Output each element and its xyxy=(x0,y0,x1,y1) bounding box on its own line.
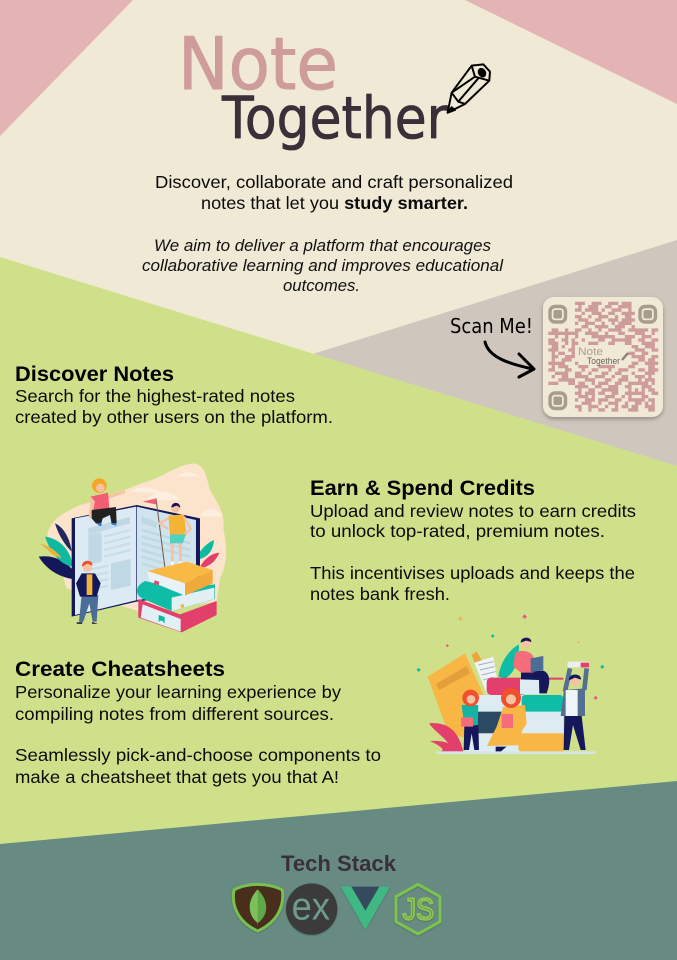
icon: Vue xyxy=(341,887,390,930)
icon: Express: ex xyxy=(292,885,330,929)
tech logos xyxy=(233,883,440,935)
section: Earn and Spend Credits xyxy=(310,477,636,604)
figure: red-haired man xyxy=(76,561,101,624)
icon: MongoDB xyxy=(233,884,283,931)
section: Discover Notes: Discover Notes xyxy=(15,363,174,386)
illustration: people reading on books xyxy=(417,614,604,754)
logo word: Together: Together xyxy=(221,84,448,152)
arrow: to QR code xyxy=(485,342,534,377)
QR code card xyxy=(543,297,663,417)
section: Create Cheatsheets: Seamlessly pick-and-choose components to xyxy=(15,745,381,765)
icon: pencil xyxy=(448,64,490,113)
callout: Scan Me: Scan Me! xyxy=(450,314,533,338)
section: Create Cheatsheets: make a cheatsheet that gets you that A! xyxy=(15,767,339,787)
leaf plants xyxy=(429,644,519,752)
logo word: Note: Note xyxy=(178,22,338,106)
section: Discover Notes: created by other users on the platform. xyxy=(15,407,333,427)
background: top-right pink triangle xyxy=(465,0,677,104)
mission statement: collaborative learning and improves educational xyxy=(142,257,504,275)
tagline: notes that let you study smarter. xyxy=(201,193,468,213)
section: Discover Notes xyxy=(15,363,333,427)
leaves xyxy=(39,523,219,579)
icon: Node.js: JS xyxy=(403,893,434,927)
section: Create Cheatsheets: Create Cheatsheets xyxy=(15,658,225,681)
section: Create Cheatsheets: compiling notes from different sources. xyxy=(15,704,334,724)
section: Earn and Spend Credits: notes bank fresh. xyxy=(310,584,450,604)
icon: Express xyxy=(286,883,337,935)
callout: Scan Me xyxy=(450,314,534,377)
background: teal footer xyxy=(0,781,677,960)
stacked books xyxy=(137,562,217,632)
QR centre logo: Note xyxy=(578,346,603,358)
figure: boy with flag xyxy=(143,498,191,570)
stacked books xyxy=(437,678,596,754)
background: green panel xyxy=(0,257,677,845)
title: Note Together logo xyxy=(178,22,490,152)
section: Earn and Spend Credits: to unlock top-rated, premium notes. xyxy=(310,521,605,541)
QR modules xyxy=(548,303,658,410)
open book xyxy=(72,505,200,617)
blob clouds xyxy=(130,472,223,517)
background: top-left pink triangle xyxy=(0,0,133,136)
illustration: people on an open book xyxy=(39,463,226,632)
figure: man reading on top xyxy=(513,638,549,693)
background: gray wedge xyxy=(300,240,677,480)
QR centre logo: Together xyxy=(587,356,620,367)
tagline: Discover, collaborate and craft personalized xyxy=(155,172,513,192)
section: Earn and Spend Credits: Upload and review notes to earn credits xyxy=(310,501,636,521)
mission statement xyxy=(142,237,504,295)
mission statement: outcomes. xyxy=(283,277,360,295)
figure: man lifting book xyxy=(561,662,589,750)
mission statement: We aim to deliver a platform that encourages xyxy=(154,237,491,255)
icon: Node.js xyxy=(396,884,440,934)
section: Discover Notes: Search for the highest-rated notes xyxy=(15,386,295,406)
folder and papers xyxy=(428,652,498,740)
section: Earn and Spend Credits: This incentivises uploads and keeps the xyxy=(310,563,635,583)
figure: sitting girl xyxy=(89,478,125,526)
QR finder centres xyxy=(554,310,652,405)
figure: girl standing xyxy=(461,690,479,750)
heading: Tech Stack: Tech Stack xyxy=(281,851,397,876)
QR centre logo xyxy=(578,346,628,367)
tagline xyxy=(155,172,513,213)
QR finder markers xyxy=(550,306,656,408)
figure: woman sitting xyxy=(487,688,527,751)
section: Earn and Spend Credits: Earn & Spend Credits xyxy=(310,477,535,500)
sparkles xyxy=(417,614,604,700)
section: Create Cheatsheets: Personalize your learning experience by xyxy=(15,682,341,702)
section: Create Cheatsheets xyxy=(15,658,381,787)
